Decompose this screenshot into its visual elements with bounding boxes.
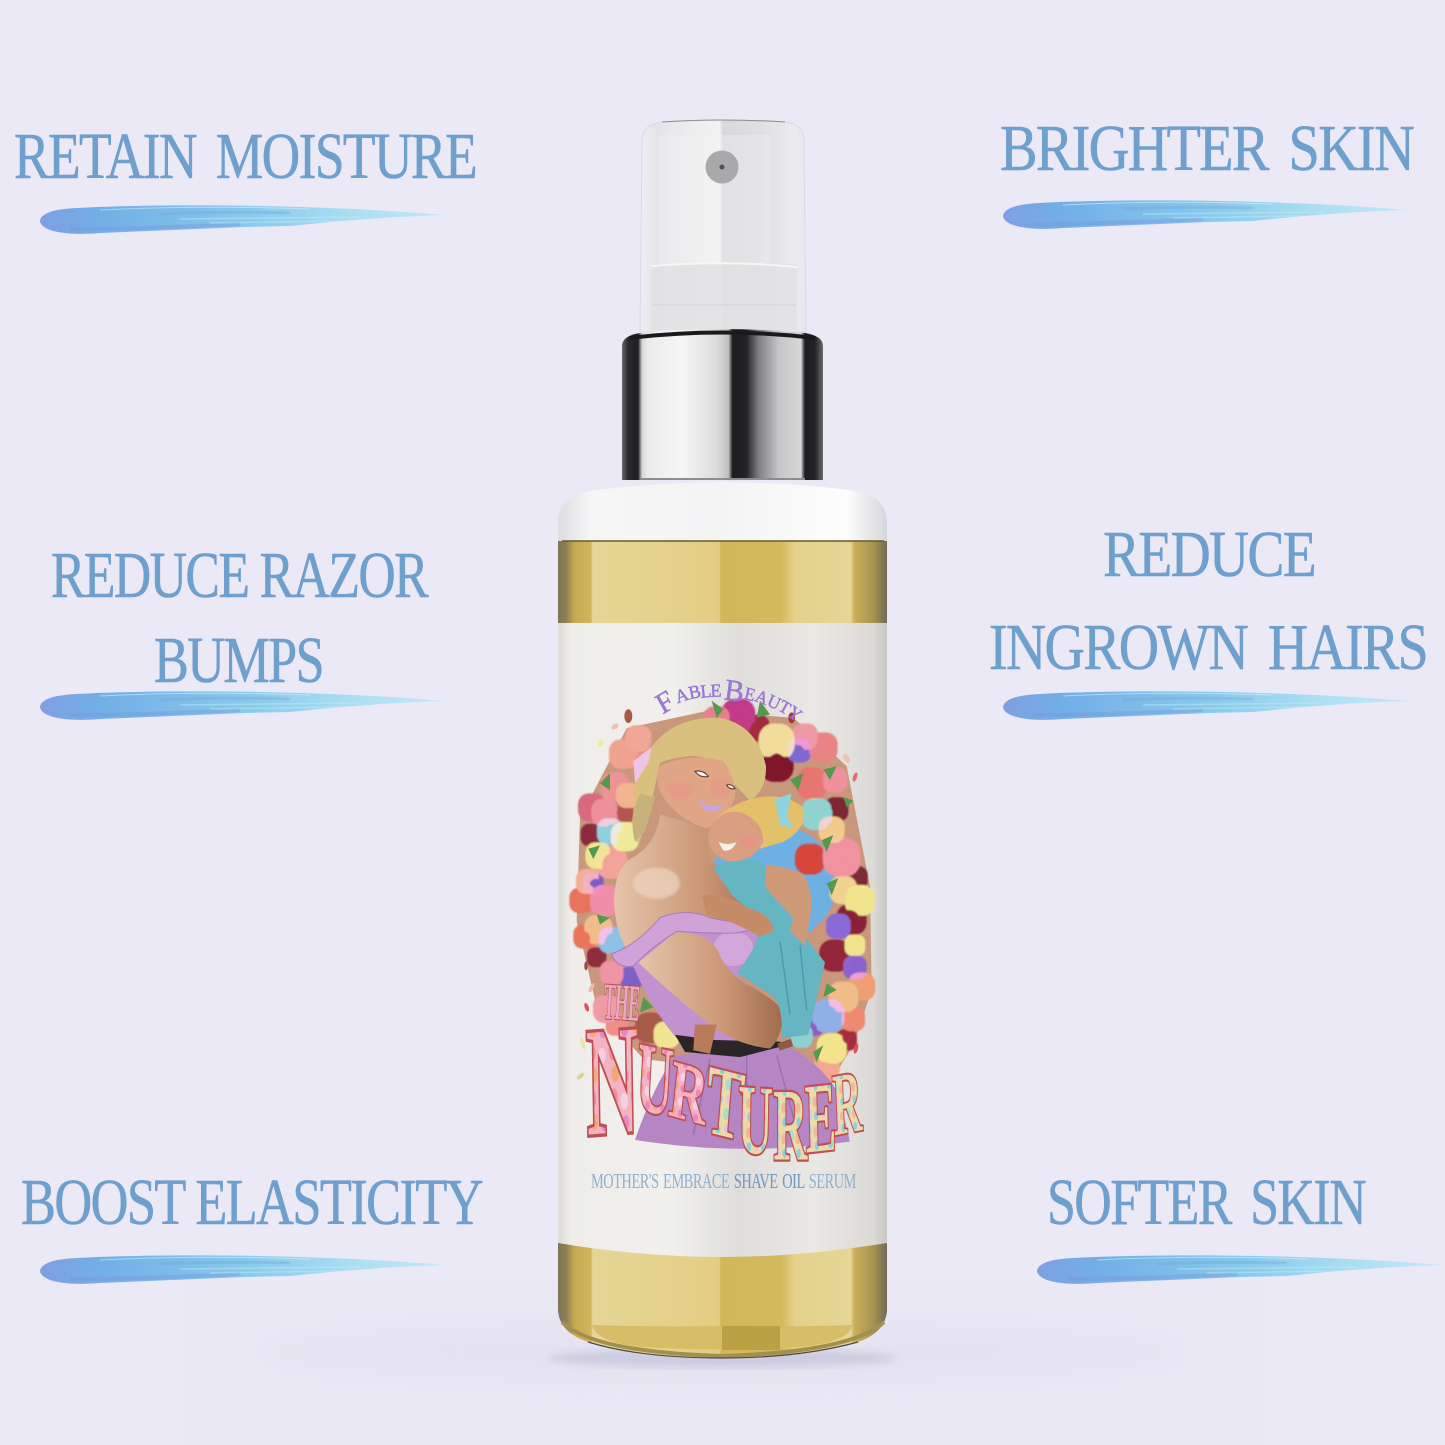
brush stroke <box>1037 1255 1442 1284</box>
benefit: retain moisture <box>14 120 476 234</box>
fable beauty brand: Y <box>784 701 806 725</box>
spray nozzle <box>706 150 738 184</box>
bodice <box>632 921 783 1045</box>
product subtitle: MOTHER'S EMBRACE SHAVE OIL SERUM <box>591 1169 857 1193</box>
child arm <box>702 895 773 937</box>
sky <box>710 825 837 942</box>
child dress <box>713 859 825 1038</box>
child leg <box>693 1024 717 1054</box>
child hair <box>717 796 804 849</box>
label <box>558 623 887 1257</box>
benefit: reduce razor bumps: BUMPS <box>154 624 323 697</box>
child figure <box>693 794 825 1054</box>
child bow <box>775 794 793 828</box>
brush stroke <box>40 1255 445 1284</box>
benefit: reduce ingrown hairs: REDUCE <box>1103 518 1315 591</box>
benefit: boost elasticity <box>21 1166 482 1284</box>
leaves <box>588 701 853 1062</box>
fable beauty brand: E <box>742 683 757 705</box>
mother face <box>657 758 735 828</box>
benefit: retain moisture: RETAIN MOISTURE <box>14 120 476 193</box>
brush stroke <box>40 691 445 720</box>
brush stroke <box>1003 691 1408 720</box>
white shoulder <box>558 482 887 542</box>
skirt <box>635 1045 850 1149</box>
hair ribbon <box>633 747 652 783</box>
fable beauty brand: A <box>753 685 771 709</box>
product name: the nurturer: U <box>737 1064 773 1176</box>
benefit: softer skin <box>1037 1166 1442 1284</box>
loose petals <box>576 709 859 1081</box>
child smile <box>718 842 737 851</box>
fable beauty brand: B <box>722 673 746 709</box>
arm <box>638 931 784 1049</box>
rose wreath <box>572 701 872 1083</box>
fable beauty brand: U <box>764 690 784 714</box>
belt <box>675 1035 787 1057</box>
product name: the nurturer <box>585 973 864 1183</box>
benefit: reduce razor bumps <box>40 539 445 720</box>
benefit: brighter skin <box>1000 112 1414 229</box>
child face <box>708 812 763 861</box>
product bottle <box>558 120 887 1358</box>
mother figure <box>612 718 850 1149</box>
product name: the nurturer: T <box>702 1045 748 1162</box>
product name: the nurturer: R <box>773 1068 808 1183</box>
wreath base <box>577 711 872 1083</box>
product name: the nurturer: R <box>831 1051 864 1155</box>
fable beauty brand: A <box>672 684 692 707</box>
bottom glass base <box>562 1322 884 1358</box>
floor shadow <box>180 1280 1265 1445</box>
mother smile <box>697 799 723 812</box>
benefit: boost elasticity: BOOST ELASTICITY <box>21 1166 482 1239</box>
benefit: reduce razor bumps: REDUCE RAZOR <box>51 539 429 612</box>
oil in bottle <box>558 541 887 1358</box>
product name: the nurturer: N <box>585 994 640 1169</box>
fable beauty brand: L <box>699 681 712 702</box>
hair <box>632 718 766 844</box>
product name: the nurturer: THE <box>602 973 642 1032</box>
mother eyes <box>695 771 708 777</box>
label illustration <box>572 673 872 1183</box>
clear spray cap <box>640 120 806 332</box>
brush stroke <box>40 205 445 234</box>
product name: the nurturer: E <box>804 1061 837 1174</box>
brush stroke <box>1003 200 1408 229</box>
fable beauty brand: T <box>775 696 795 719</box>
ruffle sleeve <box>612 912 757 967</box>
benefit: reduce ingrown hairs <box>989 518 1427 720</box>
fable beauty brand: B <box>687 681 703 703</box>
product name: the nurturer: U <box>634 1021 676 1138</box>
product name: the nurturer: R <box>665 1042 713 1143</box>
benefit: softer skin: SOFTER SKIN <box>1047 1166 1366 1239</box>
mother hand <box>765 864 811 945</box>
chrome collar <box>622 329 823 480</box>
roses <box>572 702 872 1080</box>
fable beauty brand: E <box>710 680 722 701</box>
fable beauty brand <box>650 673 806 725</box>
fable beauty brand: F <box>650 684 680 721</box>
neck and chest <box>614 814 765 952</box>
